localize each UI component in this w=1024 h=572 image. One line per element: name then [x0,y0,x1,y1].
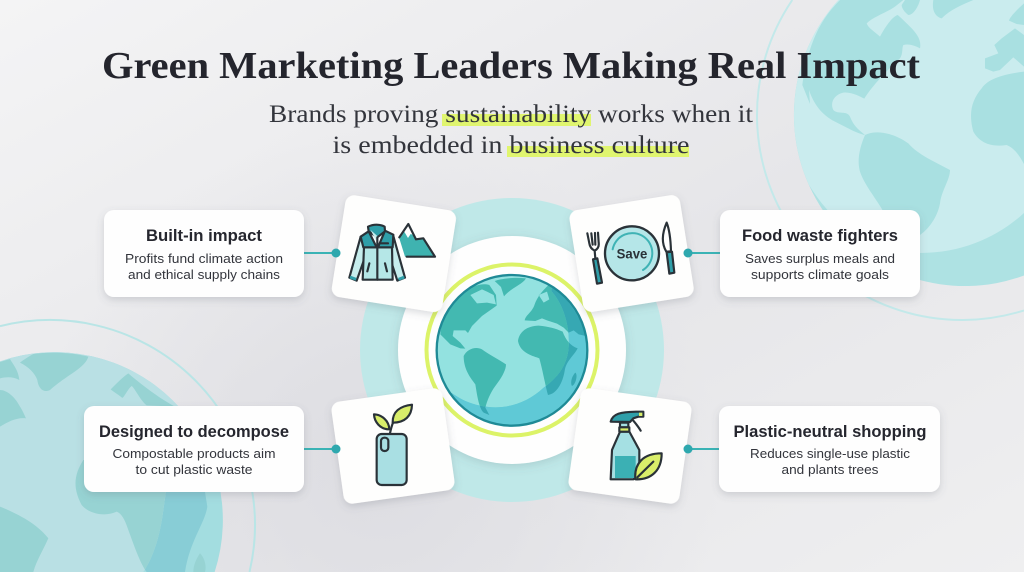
panel: food waste fighters: supports climate goals [751,268,889,282]
decorative globe: top right [757,0,1024,320]
connector: bottom left [304,448,336,450]
decorative globe: bottom left [0,320,255,572]
connector dot: bottom right [684,444,692,454]
panel: designed to decompose [84,406,304,492]
panel: plastic-neutral shopping: Plastic-neutral shopping [734,423,926,441]
panel: built-in impact: and ethical supply chains [128,268,280,282]
icon: spray bottle with leaf [611,412,662,479]
panel: designed to decompose: to cut plastic waste [136,463,253,477]
tile: phone icon [330,387,456,505]
connector: top right [688,252,720,254]
central rings [360,198,664,502]
connector: top left [304,252,336,254]
connector: bottom right [688,448,720,450]
subtitle: is embedded in business culture [332,130,690,159]
panel: plastic-neutral shopping: Reduces single-use plastic [750,447,910,461]
panel: designed to decompose: Compostable products aim [112,447,276,461]
connector dot: top right [684,248,692,258]
panel: built-in impact: Built-in impact [146,227,262,245]
subtitle: Brands proving sustainability works when it [269,99,753,128]
panel: plastic-neutral shopping [719,406,940,492]
icon: jacket and mountain [349,224,435,281]
connector dot: bottom left [332,444,340,454]
icon: compostable phone case with leaves [374,405,412,485]
panel: plastic-neutral shopping: and plants trees [782,463,878,477]
panel: built-in impact: Profits fund climate action [125,252,283,266]
panel: food waste fighters: Saves surplus meals and [745,252,895,266]
panel: food waste fighters [720,210,920,297]
panel: built-in impact [104,210,304,297]
central globe [432,271,587,426]
subtitle [269,99,753,159]
connector dot: top left [332,248,340,258]
panel: designed to decompose: Designed to decompose [99,423,289,441]
tile: plate icon [568,194,695,313]
panel: food waste fighters: Food waste fighters [742,227,898,245]
icon: plate with Save label: Save [617,246,648,262]
tile: spray bottle icon [567,387,693,505]
tile: jacket and mountain icon [331,194,457,313]
title: Green Marketing Leaders Making Real Impact [102,45,920,87]
